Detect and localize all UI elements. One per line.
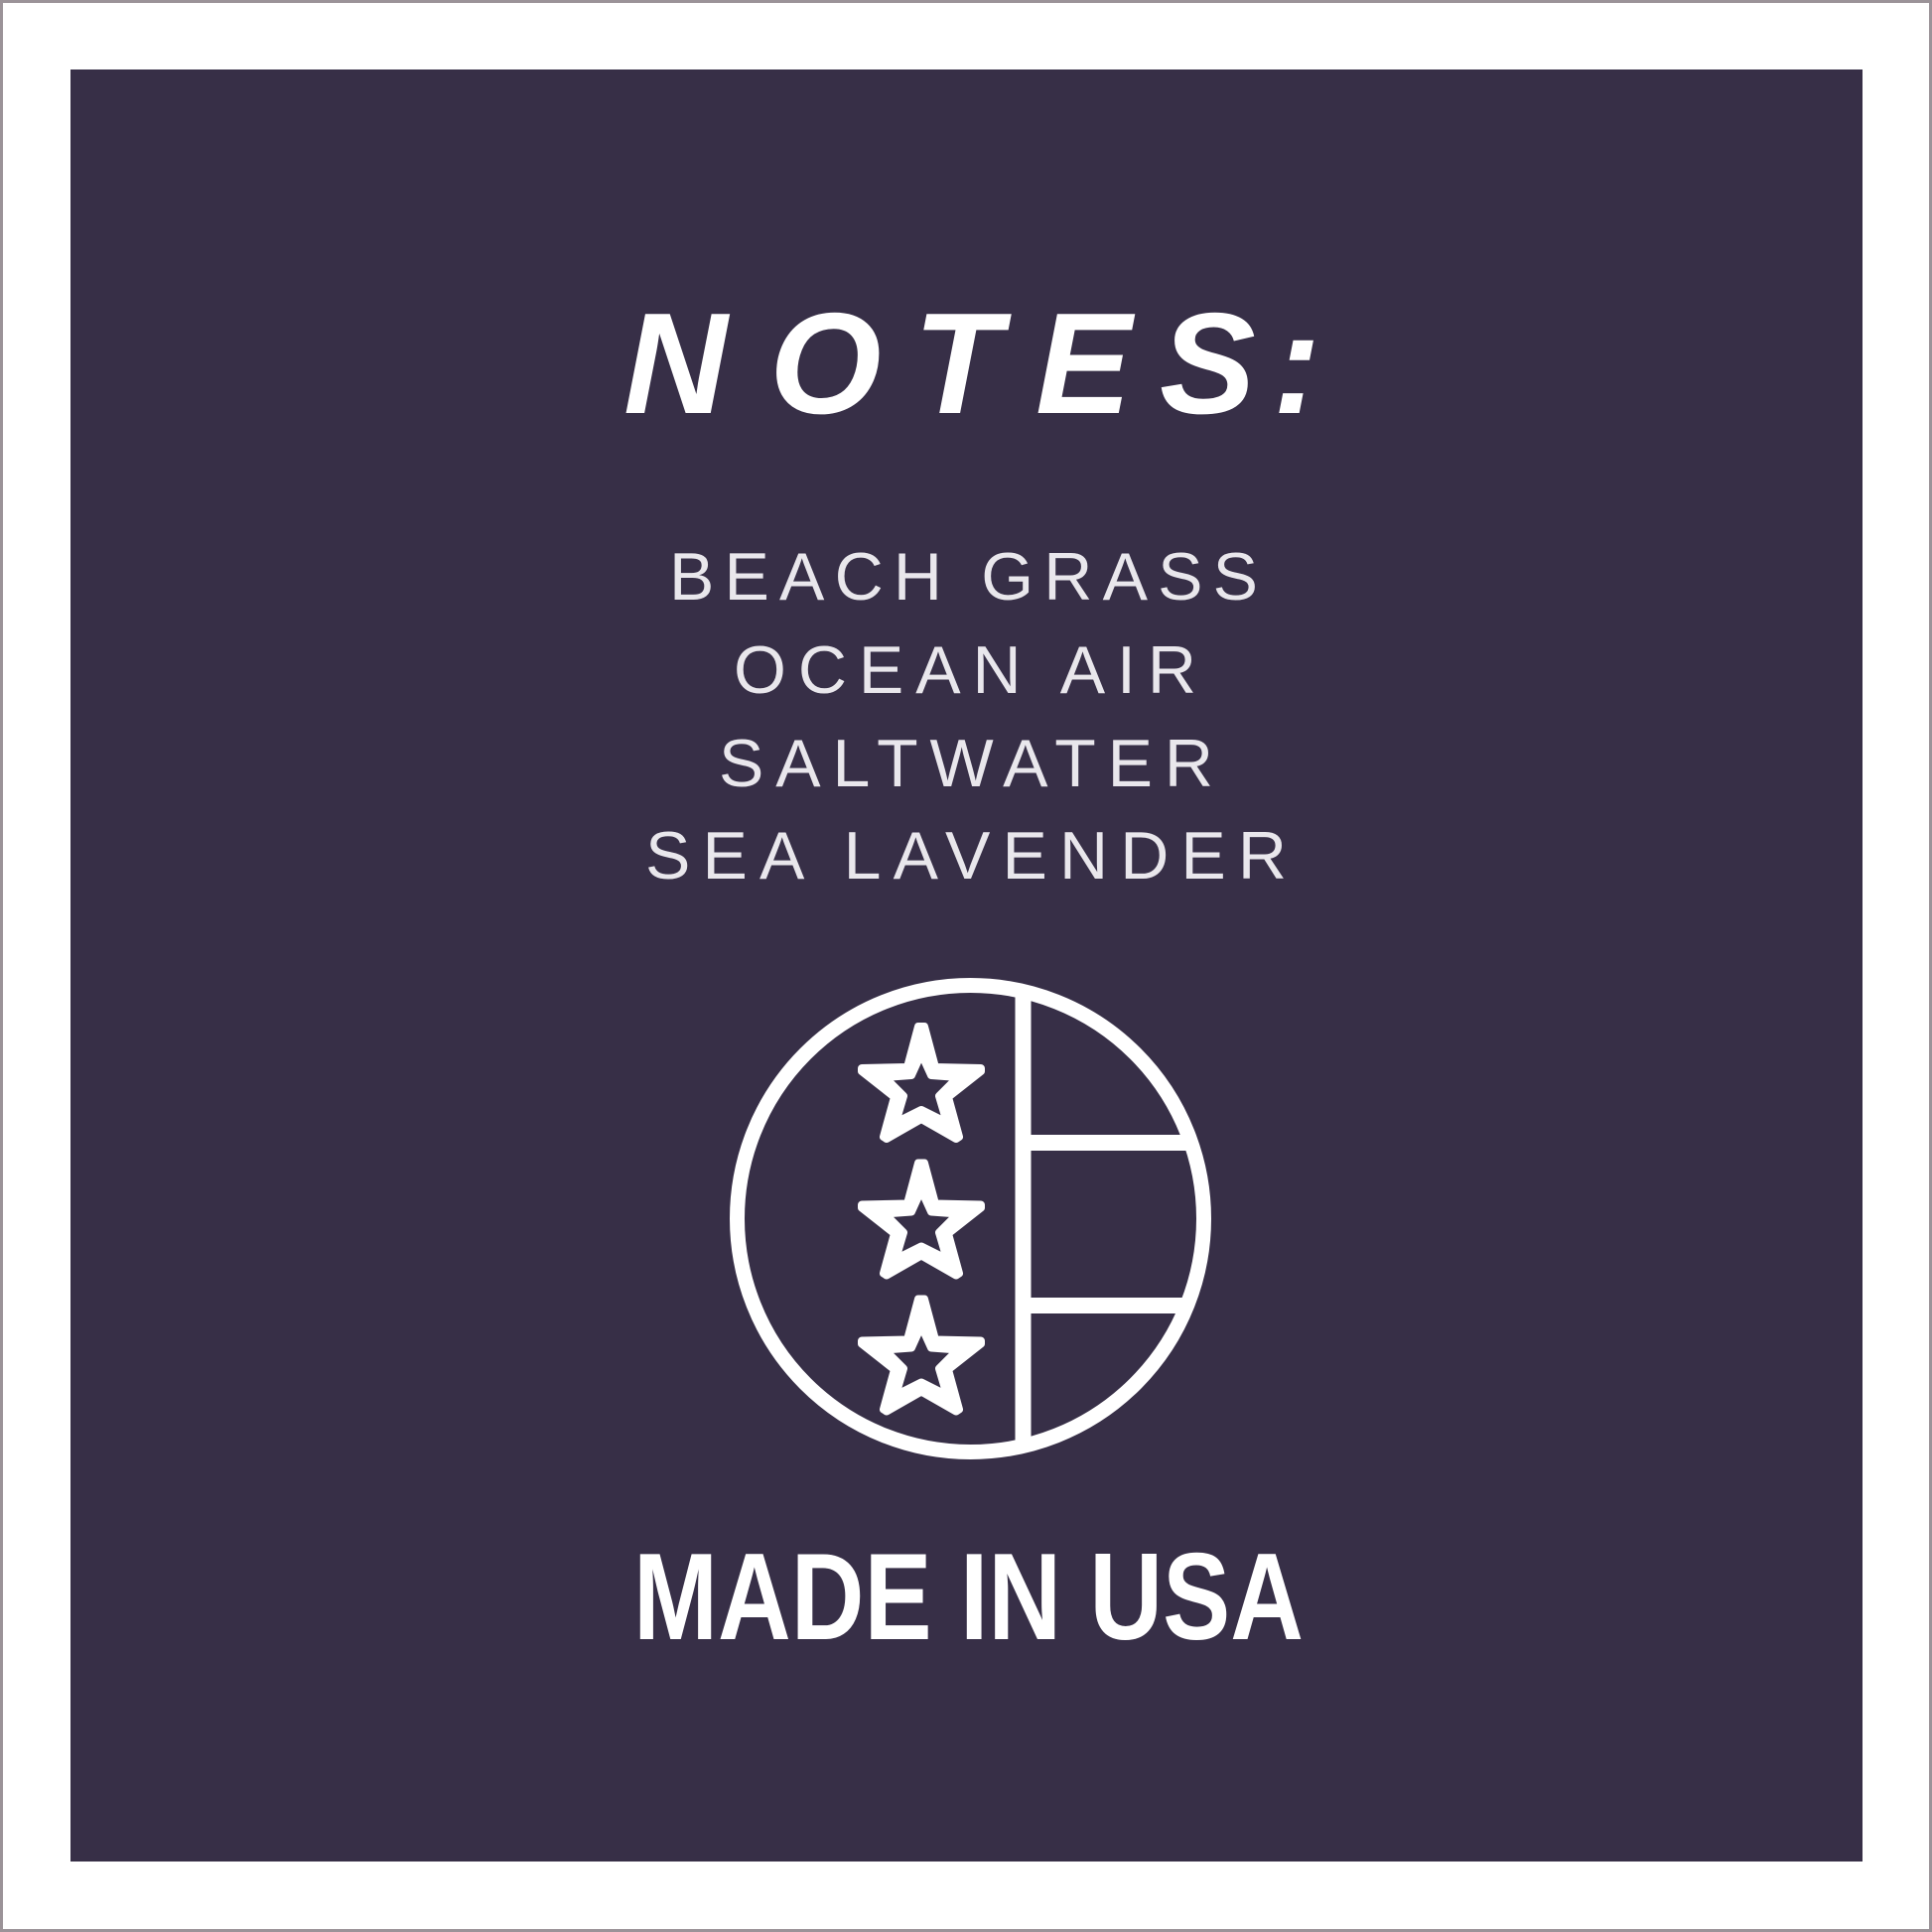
upper stripe line [1023, 1135, 1191, 1151]
heading: notes: NOTES: [623, 283, 1320, 444]
badge circle [737, 985, 1203, 1451]
caption: made in usa: MADE IN USA [633, 1529, 1304, 1666]
note: ocean air: OCEAN AIR [734, 632, 1196, 708]
flag pole divider [1015, 988, 1031, 1449]
icon: american flag badge [737, 985, 1203, 1451]
star: bottom [862, 1299, 981, 1412]
text block: scent notes list [645, 539, 1287, 894]
star: middle [862, 1164, 981, 1275]
star: top [862, 1027, 981, 1139]
note: saltwater: SALTWATER [719, 726, 1213, 801]
note: beach grass: BEACH GRASS [669, 539, 1258, 615]
note: sea lavender: SEA LAVENDER [645, 818, 1287, 894]
lower stripe line [1023, 1298, 1191, 1313]
